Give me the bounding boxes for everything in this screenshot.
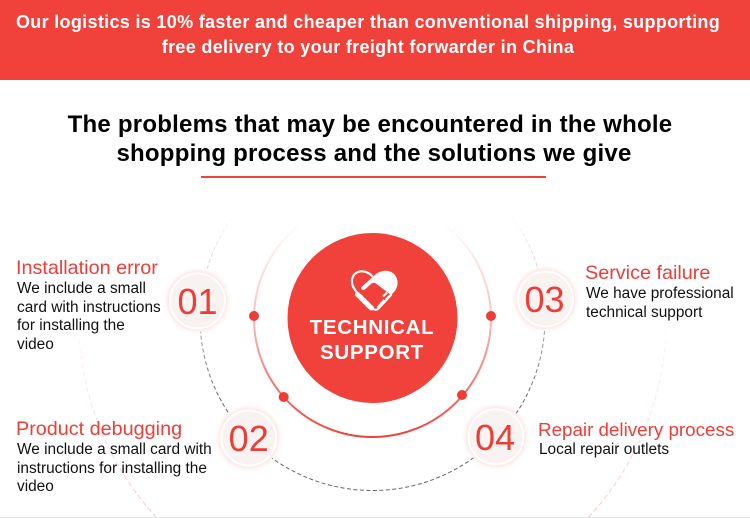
central label: TECHNICAL: [310, 316, 434, 339]
badge 02: [218, 407, 280, 469]
item 02 text: We include a small card with: [17, 441, 212, 458]
item 03 text: We have professional: [586, 285, 734, 302]
item 03 text: Service failure: [585, 262, 710, 284]
item 02 text: [16, 418, 212, 495]
ring dots: [249, 311, 496, 402]
item 01 text: for installing the: [17, 317, 125, 334]
main heading: The problems that may be encountered in the whole: [68, 110, 672, 138]
header banner: Our logistics is 10% faster and cheaper than conventional shipping, supporting: [16, 12, 720, 32]
badge 04: [465, 406, 527, 468]
central circle: [288, 233, 458, 403]
badge 03: [514, 268, 576, 330]
badge 01: [166, 270, 228, 332]
item 03 text: technical support: [586, 304, 702, 321]
item 01 text: card with instructions: [17, 299, 161, 316]
item 01 text: video: [17, 336, 54, 353]
icon: handshake heart: [352, 271, 398, 310]
bottom edge: [0, 517, 750, 518]
main heading: [68, 110, 672, 167]
item 01 text: We include a small: [17, 280, 146, 297]
outer pink dashed ring: [79, 300, 666, 517]
item 04 text: Repair delivery process: [538, 419, 734, 440]
badge 02: 02: [229, 418, 269, 459]
main heading: shopping process and the solutions we give: [116, 140, 632, 167]
item 01 text: [16, 257, 161, 353]
header banner: [0, 0, 750, 80]
item 04 text: [538, 419, 734, 458]
item 02 text: instructions for installing the: [17, 460, 207, 477]
item 04 text: Local repair outlets: [539, 441, 669, 458]
heading underline: [201, 176, 546, 178]
item 03 text: [585, 262, 734, 321]
badge 03: 03: [524, 279, 565, 320]
inner gradient ring: [254, 200, 491, 437]
item 02 text: video: [17, 478, 54, 495]
badge 04: 04: [475, 417, 515, 458]
badge 01: 01: [177, 281, 218, 322]
grey dashed ring: [200, 146, 545, 490]
item 01 text: Installation error: [16, 257, 158, 279]
central label: SUPPORT: [320, 341, 424, 364]
central label: [310, 316, 434, 364]
item 02 text: Product debugging: [16, 418, 182, 440]
header banner: free delivery to your freight forwarder in China: [162, 36, 574, 56]
